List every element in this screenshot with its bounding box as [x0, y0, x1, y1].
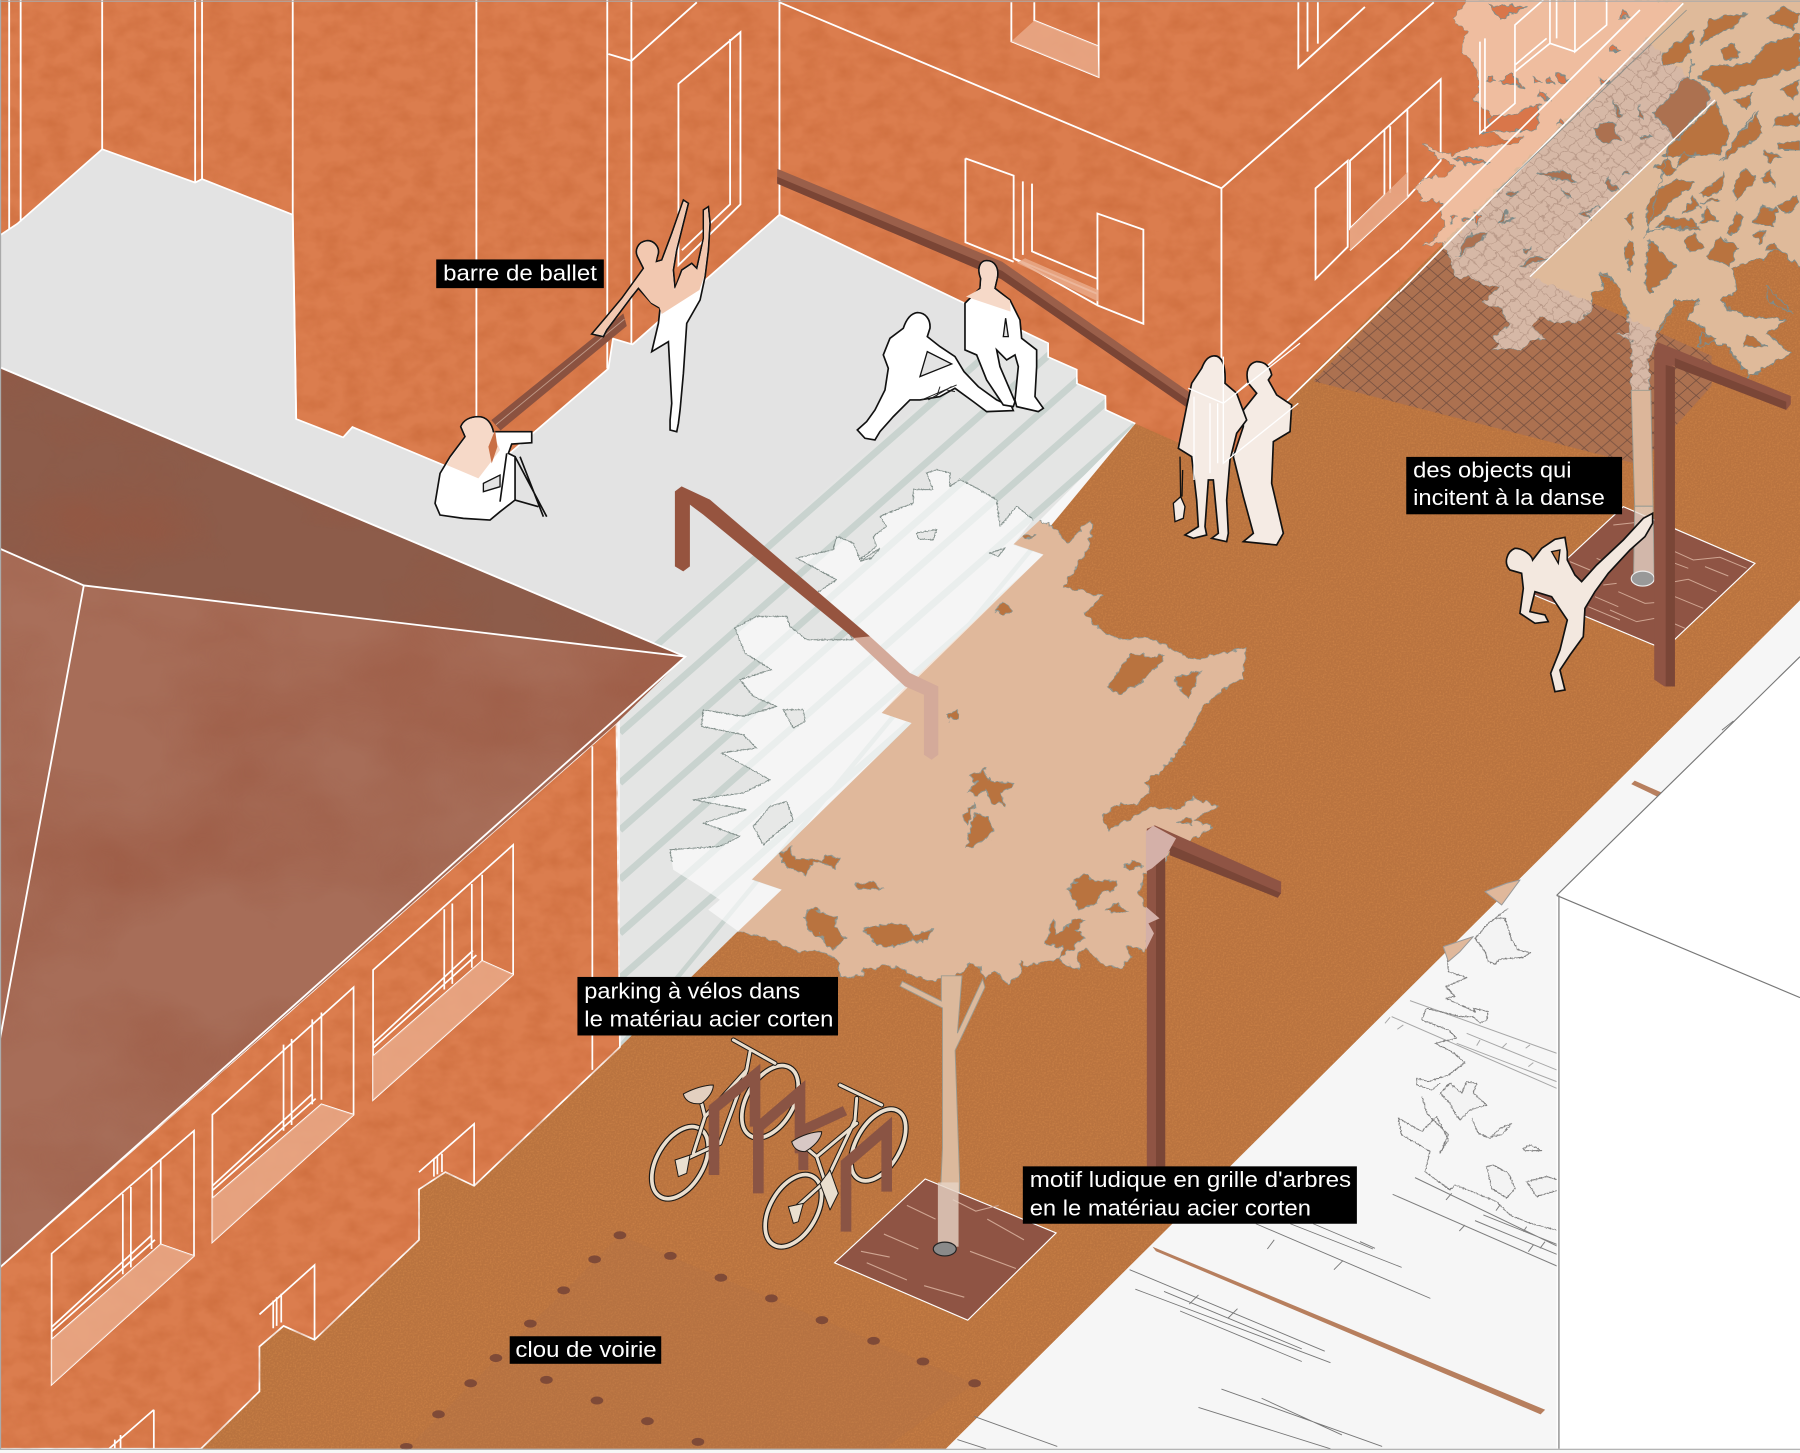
wall base line to corner [1190, 250, 1399, 463]
panel: street ground stud zone [406, 1235, 975, 1449]
bike rack and bikes [640, 1040, 917, 1256]
panel: white street [946, 600, 1800, 1449]
tree pit [933, 1242, 956, 1256]
branch lines [1645, 60, 1753, 333]
label: parking à vélos: le matériau acier corten [584, 1006, 833, 1031]
label: parking à vélos [577, 977, 838, 1035]
building corner seen through people [1188, 343, 1300, 480]
person: kicking dancer [1506, 513, 1653, 692]
label: clou de voirie: clou de voirie [515, 1337, 657, 1362]
short corten strip [1631, 781, 1666, 799]
panel: sunlit patch on stairs [670, 470, 1043, 931]
canopy gaps [778, 768, 1193, 960]
panel: roof main face [0, 585, 685, 1267]
upper wall white line work [9, 0, 1441, 480]
small patch islands [753, 530, 1005, 845]
tree grate 2 [1530, 507, 1755, 649]
woman [1178, 356, 1247, 542]
canopy gaps over wall [1450, 5, 1630, 227]
sunlit patch outline [670, 470, 1033, 931]
small canopy gaps [947, 533, 1035, 720]
faded end of stair handrail [853, 636, 938, 760]
bike rack 2 [846, 1128, 887, 1232]
label: motif ludique: motif ludique en grille d'arbres [1030, 1167, 1351, 1192]
far window and plinth lines over canopy [1400, 0, 1715, 292]
panel: tree 2 canopy [1414, 0, 1800, 397]
tinted zones inside canopy [1415, 0, 1714, 390]
panel: roof dark face [0, 367, 685, 657]
person: ballet dancer [592, 200, 710, 432]
label: motif ludique [1023, 1166, 1357, 1224]
tripod and camera details [500, 453, 547, 517]
ballet barre [491, 313, 627, 430]
canopy gap near right lobe [1173, 672, 1200, 698]
label: des objects qui incitent à la danse: des objects qui [1413, 458, 1572, 483]
window sills [52, 21, 1407, 1384]
panel: tree 1 canopy shadow [689, 520, 1246, 1000]
stair top edge highlight [1048, 343, 1135, 424]
white block building [1557, 657, 1800, 1449]
canopy gaps over hatched band [1457, 77, 1710, 267]
handbag [1173, 457, 1185, 522]
tree 1 trunk [900, 976, 985, 1251]
street paving and tree shadow outlines [1360, 880, 1558, 1267]
bike rack 1 [714, 1075, 800, 1193]
roof outlines [0, 367, 685, 1267]
person: photographer with tripod [435, 417, 547, 520]
label: des objects qui incitent à la danse [1406, 457, 1622, 514]
road studs [400, 1231, 981, 1450]
people: standing couple [1173, 343, 1300, 545]
translucent lower trunk [938, 1182, 959, 1247]
post 1 with arm [1146, 825, 1281, 1166]
post 2 with arm [1654, 342, 1791, 686]
stair handrail [675, 486, 938, 760]
canopy gaps over ground [1600, 7, 1800, 347]
label: des objects qui incitent à la danse: incitent à la danse [1413, 485, 1605, 510]
label: parking à vélos: parking à vélos dans [584, 979, 800, 1004]
panel: grey plaza [0, 149, 1048, 657]
canopy gap upper right [1108, 654, 1165, 695]
rear rack 2 [803, 1111, 845, 1170]
street paving lines [957, 721, 1745, 1449]
person: seated man [965, 261, 1043, 412]
label: motif ludique: en le matériau acier corten [1030, 1196, 1311, 1221]
lower wall white line work [52, 746, 592, 1449]
tree 2 pit [1631, 571, 1654, 586]
bike 2 [753, 1085, 917, 1256]
man [1233, 362, 1292, 545]
tree 2 trunk [1631, 390, 1654, 586]
panel: roof left face [0, 549, 84, 1039]
long handrail barre along wall [777, 169, 1192, 408]
panel: hatched shadow under far tree [1313, 40, 1715, 465]
corten strip in street [1153, 1247, 1545, 1414]
tree grate 1 [835, 1179, 1056, 1320]
panel: upper building wall [0, 0, 1686, 480]
bike 1 [640, 1040, 810, 1208]
panel: lower building wall [0, 723, 620, 1449]
label: barre de ballet: barre de ballet [443, 261, 597, 286]
person: seated woman [857, 313, 1013, 440]
panel: stairs [620, 343, 1136, 1046]
